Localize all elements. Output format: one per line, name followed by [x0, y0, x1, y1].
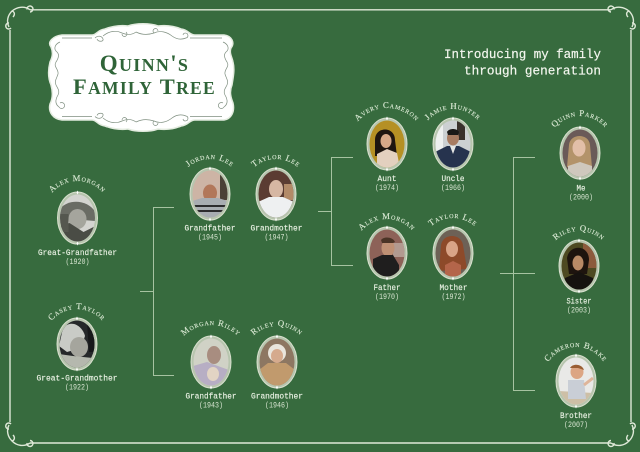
- introduction text: Introducing my family: [444, 47, 601, 62]
- person: Riley Quinn: Grandmother: [251, 392, 303, 402]
- person: Alex Morgan (father): Alex Morgan: [359, 213, 415, 231]
- person: Alex Morgan: Alex Morgan: [50, 175, 106, 193]
- person: Taylor Lee: [250, 154, 302, 242]
- person: Taylor Lee (mother): Taylor Lee: [428, 214, 476, 226]
- person: Avery Cameron: (1974): [375, 183, 399, 193]
- icon: corner flourish top right: [608, 6, 635, 29]
- portrait: [257, 334, 297, 390]
- person: Jordan Lee: Grandfather: [184, 224, 236, 234]
- person: Morgan Riley: Grandfather: [186, 392, 236, 402]
- introduction text: through generation: [464, 64, 601, 78]
- person: Jamie Hunter: [424, 103, 480, 193]
- title plaque: [49, 24, 234, 131]
- plaque scroll ornaments: [55, 28, 228, 126]
- person: Alex Morgan (father): Father: [374, 283, 400, 293]
- portrait: [556, 354, 596, 408]
- person: Avery Cameron: Avery Cameron: [356, 102, 418, 122]
- person: Riley Quinn (sister): (2003): [567, 306, 591, 316]
- person: Casey Taylor: Casey Taylor: [48, 303, 104, 320]
- person: Casey Taylor: [36, 303, 118, 392]
- portrait: [560, 126, 600, 180]
- icon: corner flourish bottom right: [608, 423, 635, 446]
- portrait: [367, 226, 407, 280]
- person: Taylor Lee: Grandmother: [250, 224, 302, 234]
- person: Quinn Parker: [552, 110, 607, 202]
- person: Cameron Blake: [544, 342, 606, 430]
- portrait: [57, 316, 97, 372]
- person: Cameron Blake: (2007): [564, 420, 588, 430]
- person: Jamie Hunter: Jamie Hunter: [424, 103, 480, 120]
- person: Quinn Parker: Me: [576, 184, 586, 194]
- person: Riley Quinn: (1946): [265, 400, 289, 410]
- person: Alex Morgan (father): (1970): [375, 292, 399, 302]
- person: Alex Morgan: [38, 175, 117, 267]
- connector: parents to children: [500, 158, 535, 390]
- title text: QUINN'S: [100, 51, 189, 76]
- introduction text: [444, 47, 601, 78]
- person: Morgan Riley: (1943): [199, 400, 223, 410]
- person: Riley Quinn (sister): [552, 225, 604, 316]
- person: Taylor Lee: (1947): [264, 232, 288, 242]
- person: Cameron Blake: Cameron Blake: [544, 342, 606, 362]
- person: Taylor Lee: Taylor Lee: [250, 154, 300, 167]
- connector: great-grandparents to grandparents: [140, 208, 174, 376]
- person: Jordan Lee: [184, 154, 236, 242]
- person: Morgan Riley: Morgan Riley: [180, 320, 240, 336]
- person: Casey Taylor: Great-Grandmother: [36, 374, 118, 384]
- portrait: [58, 190, 98, 246]
- portrait: [433, 116, 473, 172]
- person: Casey Taylor: (1922): [65, 382, 89, 392]
- person: Avery Cameron: [356, 102, 418, 193]
- person: Avery Cameron: Aunt: [378, 174, 396, 184]
- person: Jamie Hunter: (1966): [441, 183, 465, 193]
- person: Taylor Lee (mother): (1972): [442, 292, 466, 302]
- person: Quinn Parker: Quinn Parker: [552, 110, 607, 128]
- person: Jamie Hunter: Uncle: [442, 174, 464, 184]
- person: Riley Quinn: [250, 320, 303, 410]
- icon: corner flourish bottom left: [6, 423, 33, 446]
- connector: grandparents to parents: [318, 158, 353, 266]
- person: Riley Quinn (sister): Riley Quinn: [552, 225, 604, 240]
- person: Alex Morgan (father): [359, 213, 415, 302]
- portrait: [256, 166, 296, 222]
- icon: corner flourish top left: [6, 6, 33, 29]
- title plaque: FAMILY TREE: [73, 74, 216, 99]
- portrait: [190, 166, 230, 222]
- person: Morgan Riley: [180, 320, 240, 410]
- portrait: [367, 116, 407, 172]
- person: Quinn Parker: (2000): [569, 192, 593, 202]
- person: Cameron Blake: Brother: [560, 411, 592, 421]
- person: Alex Morgan: Great-Grandfather: [38, 248, 117, 258]
- person: Taylor Lee (mother): [428, 214, 476, 302]
- person: Taylor Lee (mother): Mother: [440, 283, 468, 293]
- person: Riley Quinn: Riley Quinn: [250, 320, 302, 336]
- person: Alex Morgan: (1920): [66, 257, 90, 267]
- person: Riley Quinn (sister): Sister: [566, 296, 592, 306]
- portrait: [559, 238, 599, 294]
- person: Jordan Lee: Jordan Lee: [186, 154, 234, 167]
- portrait: [433, 226, 473, 280]
- portrait: [191, 334, 231, 390]
- person: Jordan Lee: (1945): [198, 232, 222, 242]
